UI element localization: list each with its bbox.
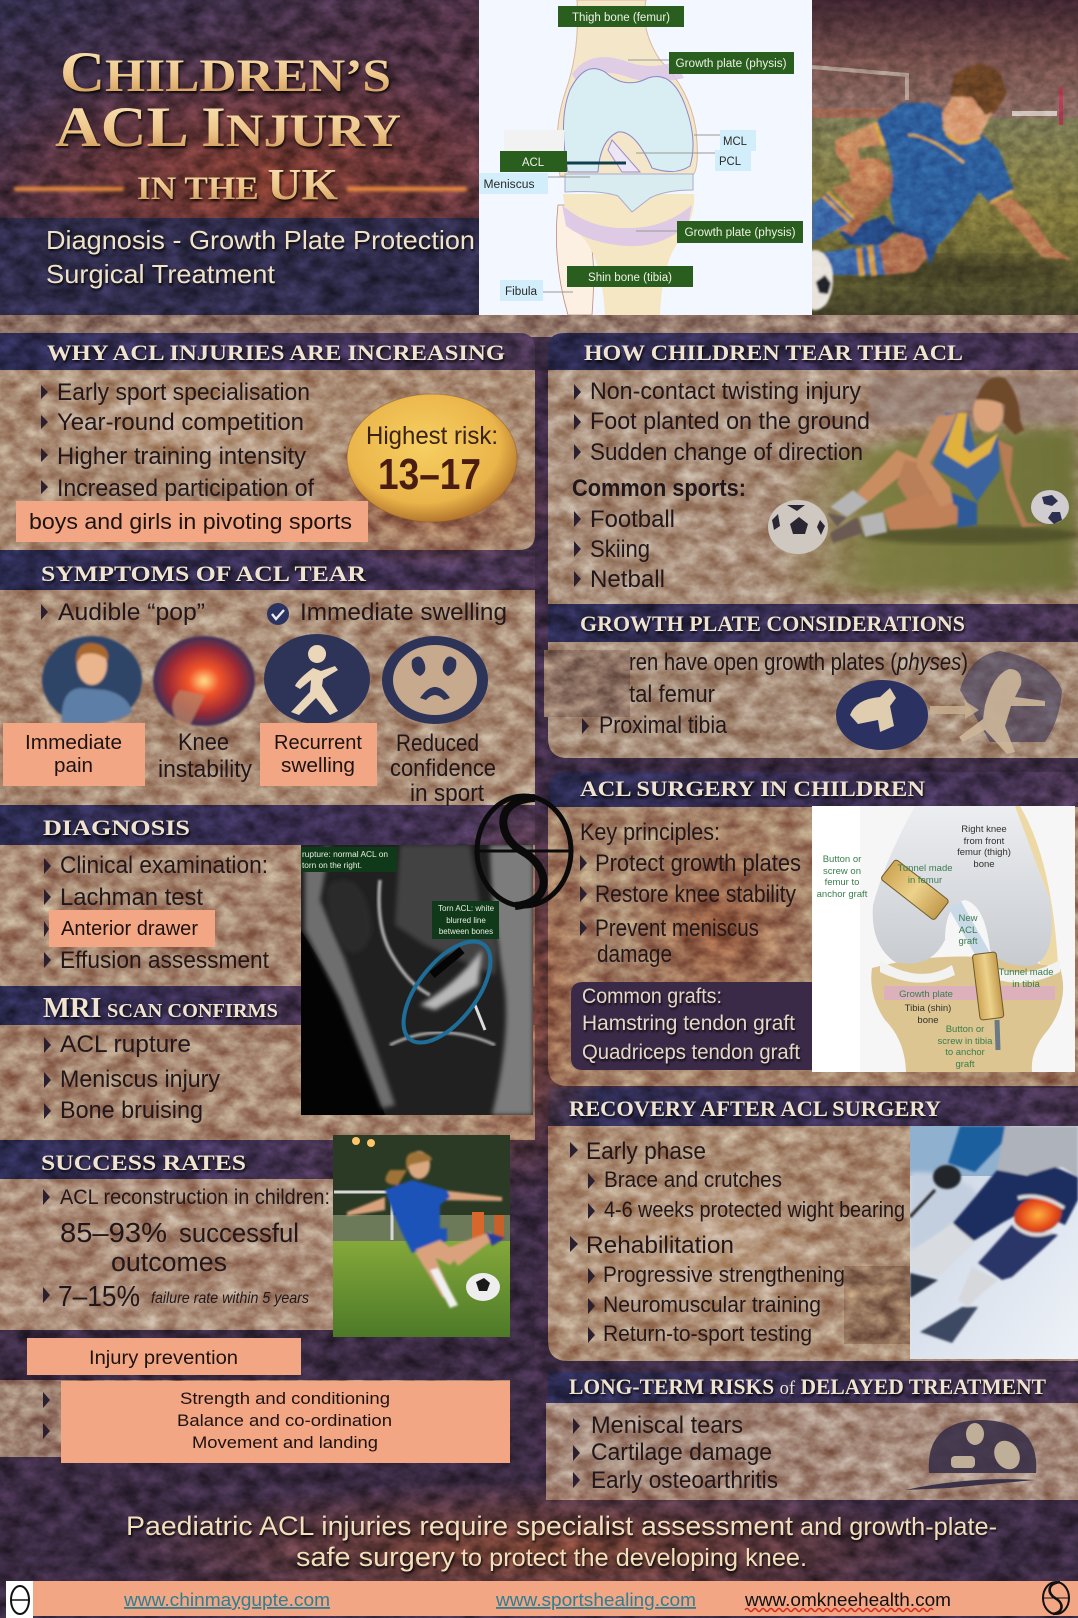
- icon: sad face: [382, 636, 488, 724]
- panel: long-term risks list: [573, 1412, 778, 1494]
- torn ACL blue ring: [387, 927, 507, 1057]
- label: Meniscus: Meniscus: [484, 179, 535, 191]
- diagram labels: to anchor: [945, 1047, 985, 1058]
- panel: key principles: Protect growth plates: [595, 850, 801, 877]
- closing message: safe surgery: [296, 1542, 456, 1572]
- diagram labels: Button or: [946, 1024, 984, 1035]
- footer bar: [6, 1581, 1078, 1618]
- panel: long-term risks list: Cartilage damage: [591, 1439, 772, 1466]
- panel: common grafts: Hamstring tendon graft: [582, 1012, 795, 1035]
- panel: growth plate text: [582, 649, 968, 739]
- panel: success rates: failure rate within 5 years: [151, 1290, 309, 1307]
- tibia: [563, 194, 694, 315]
- photo: girl kicking football: [333, 1135, 510, 1337]
- panel: success rates: ACL reconstruction in children:: [60, 1186, 330, 1209]
- diagram labels: femur (thigh): [957, 847, 1011, 858]
- panel: recovery list: Progressive strengthening: [603, 1262, 845, 1287]
- raised leg: [838, 160, 893, 236]
- diagram labels: in tibia: [1012, 979, 1040, 990]
- closing message: [126, 1511, 997, 1572]
- panel: recovery list: Brace and crutches: [604, 1167, 782, 1192]
- MRI caption torn ACL: [432, 901, 499, 939]
- MRI caption torn ACL: between bones: [439, 927, 493, 936]
- section heading: growth plate considerations: GROWTH PLATE CONSIDERATIONS: [580, 611, 965, 636]
- panel: MRI findings list: [44, 1031, 220, 1124]
- lower leg: [978, 1225, 1058, 1280]
- cruciate ligaments: [608, 140, 640, 172]
- panel: how children tear the ACL list: Netball: [590, 566, 665, 593]
- subtitle: Surgical Treatment: [46, 259, 276, 289]
- MRI caption torn ACL: blurred line: [446, 916, 486, 925]
- label: PCL: PCL: [719, 156, 742, 168]
- shorts: [839, 215, 938, 265]
- sleeve: [948, 1126, 1005, 1172]
- callout: immediate pain: [3, 723, 145, 786]
- panel: key principles: Prevent meniscus: [595, 915, 759, 942]
- MRI caption torn ACL: Torn ACL: white: [438, 904, 495, 913]
- panel: recovery list: Early phase: [586, 1138, 706, 1165]
- panel: how children tear the ACL list: Sudden change of direction: [590, 439, 863, 466]
- panel: success rates: 7–15%: [58, 1281, 140, 1313]
- section heading: MRI scan confirms: MRI SCAN CONFIRMS: [43, 993, 278, 1024]
- panel: diagnosis list: Lachman test: [60, 884, 203, 911]
- label: Growth plate upper: [669, 52, 794, 74]
- panel: symptoms top row: Audible “pop”: [58, 599, 205, 626]
- photo: injured girl with footballs: [768, 376, 1078, 592]
- head: [973, 392, 1003, 432]
- panel: symptoms top row: Immediate swelling: [300, 599, 507, 626]
- tibial graft tunnel: [972, 952, 1004, 1020]
- panel: how children tear the ACL list: [572, 378, 870, 593]
- diagram labels: Tunnel made: [897, 863, 953, 874]
- link: omkneehealth: www.omkneehealth.com: [744, 1590, 951, 1610]
- white lower trouser: [910, 1223, 975, 1277]
- diagram labels: graft: [955, 1059, 975, 1070]
- panel: recovery list: 4-6 weeks protected wight bearing: [604, 1197, 905, 1222]
- MRI caption top-left: torn on the right.: [302, 861, 362, 870]
- closing message: and growth-plate-: [800, 1513, 997, 1541]
- label: ACL: [500, 151, 567, 172]
- closing message: Paediatric ACL injuries require specialist assessment: [126, 1511, 794, 1541]
- label: knee instability: [158, 729, 252, 783]
- white patch: [504, 130, 564, 151]
- label: Growth plate lower: Growth plate (physis): [684, 227, 796, 239]
- panel: how children tear the ACL list: Common sports:: [572, 475, 746, 502]
- panel: why injuries increasing list: [41, 379, 314, 502]
- panel: success rates: 85–93%: [60, 1217, 167, 1248]
- ACL pointer: [567, 162, 626, 164]
- callout: anterior drawer: [49, 910, 215, 947]
- title block: [55, 41, 401, 209]
- new ACL graft: [955, 905, 985, 958]
- icon: knee joint dome: [905, 1420, 1036, 1490]
- panel: common grafts: [571, 982, 812, 1070]
- callout: injury prevention list: Movement and landing: [192, 1433, 378, 1452]
- diagram labels: Button or: [823, 854, 861, 865]
- panel: recovery list: Rehabilitation: [586, 1232, 734, 1259]
- diagram labels: bone: [917, 1015, 939, 1026]
- subtitle: [46, 225, 475, 289]
- football small: [1031, 490, 1069, 524]
- panel: recovery list: [570, 1138, 905, 1346]
- panel: how children tear the ACL list: Non-contact twisting injury: [590, 378, 861, 405]
- callout: immediate pain: pain: [54, 755, 93, 777]
- panel: growth plate text: tal femur: [629, 681, 715, 708]
- knee anatomy diagram: [479, 0, 812, 315]
- callout: recurrent swelling: Recurrent: [274, 732, 362, 754]
- label: Thigh bone: [558, 6, 684, 27]
- badge: highest risk 13-17: [347, 394, 517, 522]
- panel: common grafts: Common grafts:: [582, 985, 722, 1008]
- decorative glow line left of UK: [14, 187, 124, 191]
- diagram labels: Right knee: [961, 824, 1007, 835]
- hand on knee: [849, 158, 889, 188]
- label: reduced confidence in sport: [390, 730, 496, 807]
- badge: highest risk 13-17: Highest risk:: [366, 422, 498, 450]
- label: Shin bone: [567, 266, 693, 287]
- panel: why injuries increasing list: Increased participation of: [57, 475, 314, 502]
- section heading: recovery: RECOVERY AFTER ACL SURGERY: [569, 1096, 941, 1121]
- callout: injury prevention list: Balance and co-ordination: [177, 1411, 392, 1430]
- diagram labels: [817, 824, 1054, 1070]
- panel: common grafts: Quadriceps tendon graft: [582, 1041, 800, 1064]
- navy thighs: [953, 1170, 1035, 1242]
- panel: success rates: outcomes: [111, 1247, 227, 1277]
- diagram labels: graft: [958, 936, 978, 947]
- logo: footer right: [1043, 1582, 1070, 1614]
- panel: how children tear the ACL list: Foot planted on the ground: [590, 408, 870, 435]
- glove and pole: [933, 1165, 961, 1189]
- icon: recurrent swelling figure: [264, 634, 370, 724]
- panel: how children tear the ACL list: Football: [590, 506, 675, 533]
- title line: ACL Injury: ACL I NJURY: [55, 96, 401, 159]
- callout: immediate pain: Immediate: [25, 732, 122, 754]
- label: Growth plate upper: Growth plate (physis): [676, 58, 787, 70]
- panel: why injuries increasing list: Higher training intensity: [57, 443, 306, 470]
- diagram labels: screw in tibia: [938, 1036, 993, 1047]
- diagram labels: from front: [964, 836, 1005, 847]
- raised shin and thigh: [857, 450, 920, 503]
- diagram labels: screw on: [823, 866, 861, 877]
- title line: in the UK: IN THE UK: [137, 160, 338, 209]
- link: sportshealing: www.sportshealing.com: [495, 1590, 696, 1610]
- section heading: why ACL injuries are increasing: WHY ACL INJURIES ARE INCREASING: [47, 340, 505, 365]
- label: Fibula: [500, 280, 543, 301]
- diagram labels: bone: [973, 859, 995, 870]
- photo: injured boy footballer: [797, 0, 1078, 315]
- diagram labels: New: [958, 913, 978, 924]
- decorative glow line right of UK: [347, 187, 467, 191]
- callout: injury prevention list: [61, 1381, 510, 1463]
- section heading: how children tear the ACL: HOW CHILDREN TEAR THE ACL: [584, 340, 963, 365]
- femur bone: [557, 0, 697, 176]
- top: [932, 413, 1000, 502]
- icon: boy in pain: [42, 636, 142, 724]
- hair: [950, 63, 1007, 115]
- raised sock: [812, 197, 849, 243]
- subtitle: Diagnosis - Growth Plate Protection: [46, 225, 475, 255]
- panel: MRI findings list: ACL rupture: [60, 1031, 191, 1058]
- section heading: ACL surgery in children: ACL SURGERY IN CHILDREN: [580, 776, 925, 801]
- socks: [830, 490, 868, 517]
- callout: boys and girls in pivoting sports: [16, 501, 368, 542]
- label: Growth plate lower: [677, 221, 803, 243]
- icon: knee instability burst: [153, 636, 255, 726]
- MRI caption top-left: [301, 847, 397, 872]
- link: chinmaygupte: www.chinmaygupte.com: [123, 1590, 330, 1610]
- femoral cartilage: [563, 69, 693, 172]
- label: reduced confidence in sport: in sport: [410, 780, 484, 807]
- callout heading: injury prevention: Injury prevention: [89, 1348, 238, 1369]
- diagram labels: in femur: [908, 875, 942, 886]
- panel: success rates: successful: [179, 1218, 299, 1248]
- callout: boys and girls in pivoting sports: boys and girls in pivoting sports: [29, 509, 352, 534]
- label: Thigh bone: Thigh bone (femur): [572, 12, 670, 24]
- diagram labels: anchor graft: [817, 889, 868, 900]
- football large: [768, 500, 828, 554]
- section heading: symptoms: SYMPTOMS OF ACL TEAR: [41, 561, 367, 586]
- left arm: [835, 122, 884, 168]
- section heading: long-term risks: LONG-TERM RISKS of DELAYED TREATMENT: [569, 1374, 1046, 1399]
- jacket: [997, 1126, 1078, 1177]
- panel: key principles: Key principles:: [580, 819, 720, 846]
- panel: growth plate text: Proximal tibia: [599, 712, 728, 739]
- surgical knee diagram: [812, 806, 1075, 1072]
- lower sock: [817, 245, 885, 275]
- panel: diagnosis list: [44, 852, 269, 974]
- MRI caption top-left: rupture: normal ACL on: [302, 850, 388, 859]
- face: [942, 97, 992, 145]
- ball: [797, 250, 833, 310]
- label: PCL: [715, 150, 751, 171]
- panel: symptoms top row: [41, 599, 507, 626]
- panel: key principles: [580, 819, 801, 968]
- femur: [873, 806, 1052, 966]
- bullets behind injury prevention box: [43, 1392, 50, 1439]
- label: ACL: ACL: [522, 157, 545, 169]
- label: knee instability: Knee: [178, 729, 229, 756]
- photo: injured skier: [910, 1126, 1078, 1359]
- diagram labels: Tunnel made: [998, 967, 1054, 978]
- lower leg: [883, 492, 958, 530]
- panel: success rates: [43, 1186, 330, 1313]
- panel: long-term risks list: Meniscal tears: [591, 1412, 743, 1439]
- panel: why injuries increasing list: Early sport specialisation: [57, 379, 310, 406]
- section heading: diagnosis: DIAGNOSIS: [43, 815, 190, 840]
- label: reduced confidence in sport: Reduced: [396, 730, 479, 757]
- lower thigh: [879, 233, 927, 275]
- right arm: [992, 197, 1072, 260]
- femoral graft tunnel: [880, 859, 949, 921]
- panel: long-term risks list: Early osteoarthritis: [591, 1467, 778, 1494]
- arms: [917, 413, 957, 507]
- growth plate tibia band: [562, 205, 692, 246]
- callout: recurrent swelling: swelling: [281, 755, 355, 777]
- icon: crouching and lunging athlete: [836, 651, 1062, 754]
- panel: recovery list: Return-to-sport testing: [603, 1321, 812, 1346]
- title line: Children's: CHILDREN’S: [60, 41, 391, 104]
- callout: injury prevention list: Strength and conditioning: [180, 1389, 390, 1408]
- panel: why injuries increasing list: Year-round competition: [57, 409, 304, 436]
- badge: highest risk 13-17: 13–17: [378, 450, 481, 499]
- diagram labels: femur to: [825, 877, 859, 888]
- growth plate band: [884, 986, 1055, 1000]
- knee glow: [1010, 1191, 1066, 1239]
- panel: recovery list: Neuromuscular training: [603, 1292, 821, 1317]
- label: knee instability: instability: [158, 756, 252, 783]
- panel: how children tear the ACL list: Skiing: [590, 536, 650, 563]
- label: Fibula: Fibula: [505, 286, 538, 298]
- jersey: [875, 103, 1014, 245]
- panel: key principles: damage: [597, 941, 672, 968]
- diagram labels: Growth plate: [899, 989, 953, 1000]
- label: Shin bone: Shin bone (tibia): [588, 272, 672, 284]
- label: MCL: MCL: [723, 136, 748, 148]
- logo: overlapping monogram: [476, 796, 572, 906]
- panel: MRI findings list: Meniscus injury: [60, 1066, 220, 1093]
- tibia: [871, 956, 1063, 1072]
- panel: growth plate text: ren have open growth plates (physes): [629, 649, 968, 676]
- section heading: success rates: SUCCESS RATES: [41, 1150, 246, 1175]
- label: reduced confidence in sport: confidence: [390, 755, 496, 782]
- panel: MRI findings list: Bone bruising: [60, 1097, 203, 1124]
- closing message: to protect the developing knee.: [461, 1544, 807, 1572]
- meniscus: [565, 174, 693, 212]
- shorts: [927, 483, 977, 528]
- logo: footer left: [6, 1581, 33, 1618]
- shoes: [827, 513, 847, 527]
- icon: check badge: [267, 603, 289, 625]
- panel: key principles: Restore knee stability: [595, 881, 796, 908]
- diagram labels: Tibia (shin): [905, 1003, 951, 1014]
- panel: diagnosis list: Clinical examination:: [60, 852, 268, 879]
- panel: diagnosis list: Effusion assessment: [60, 947, 269, 974]
- MRI scan image: [301, 845, 533, 1115]
- callout: anterior drawer: Anterior drawer: [61, 918, 198, 940]
- callout: recurrent swelling: [260, 723, 377, 786]
- label: MCL: [720, 130, 756, 151]
- boot: [958, 1267, 998, 1307]
- football: [466, 1273, 500, 1301]
- meniscus: [880, 960, 1060, 983]
- callout heading: injury prevention: [27, 1338, 301, 1375]
- fibula: [556, 205, 594, 315]
- diagram labels: ACL: [959, 925, 977, 936]
- label: Meniscus: [479, 173, 548, 194]
- growth plate femur band: [572, 57, 684, 80]
